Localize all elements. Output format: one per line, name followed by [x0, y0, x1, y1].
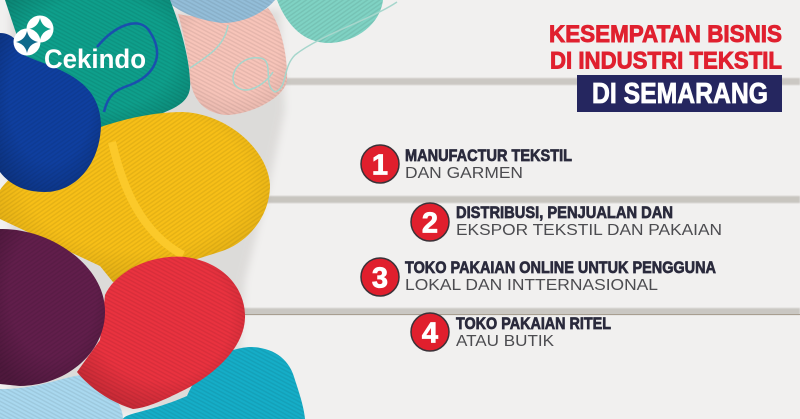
yarn balls — [0, 0, 397, 419]
badge 4 — [411, 313, 449, 351]
yarn: pale loose threads — [190, 2, 397, 92]
yarn: blue thread — [97, 23, 157, 112]
title banner text: DI SEMARANG — [592, 78, 768, 110]
item 3 bold line: TOKO PAKAIAN ONLINE UNTUK PENGGUNA — [405, 259, 716, 277]
badge 2: 2 — [422, 208, 438, 240]
item 3 — [361, 258, 716, 296]
item 2 light line: EKSPOR TEKSTIL DAN PAKAIAN — [456, 222, 722, 239]
yarn: teal — [5, 0, 190, 135]
badge 2 — [411, 203, 449, 241]
yarn: light blue top — [167, 0, 275, 23]
badge 1: 1 — [372, 150, 388, 182]
badge 3: 3 — [372, 262, 388, 294]
yarn: purple — [0, 229, 105, 386]
logo wordmark: Cekindo — [44, 44, 146, 74]
title line 1: KESEMPATAN BISNIS — [549, 21, 782, 48]
item 1 — [361, 145, 572, 183]
badge 4: 4 — [422, 318, 438, 350]
item 1 bold line: MANUFACTUR TEKSTIL — [405, 147, 572, 165]
item 1 light line: DAN GARMEN — [405, 165, 523, 182]
item 4 light line: ATAU BUTIK — [456, 333, 554, 350]
title — [549, 21, 782, 112]
item 2 — [411, 203, 722, 241]
logo: Cekindo — [14, 16, 146, 74]
item 4 bold line: TOKO PAKAIAN RITEL — [456, 315, 611, 333]
yarn: aqua top right — [277, 0, 383, 43]
yarn: light blue bottom — [0, 375, 123, 419]
item 3 light line: LOKAL DAN INTTERNASIONAL — [405, 277, 658, 294]
item 4 — [411, 313, 611, 351]
item 2 bold line: DISTRIBUSI, PENJUALAN DAN — [456, 204, 673, 222]
badge 3 — [361, 258, 399, 296]
yarn: pink — [178, 8, 287, 115]
yarn: royal blue — [0, 33, 101, 192]
yarn: cyan bottom — [123, 347, 305, 419]
badge 1 — [361, 145, 399, 183]
title banner: navy box — [577, 75, 782, 112]
yarn: soft shadow — [10, 10, 295, 410]
yarn: yellow — [0, 112, 270, 282]
yarn: red — [77, 257, 245, 409]
title line 2: DI INDUSTRI TEKSTIL — [550, 48, 782, 74]
icon: logo circles with diamond stars — [14, 16, 54, 56]
